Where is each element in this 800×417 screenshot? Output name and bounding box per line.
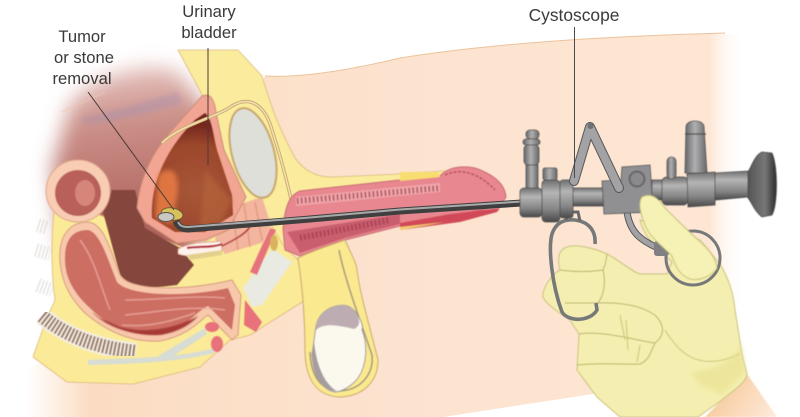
scope barrel xyxy=(520,188,542,217)
scrotum and testis xyxy=(298,240,378,397)
cystoscope lever arm xyxy=(574,123,619,188)
leader line: tumor or stone xyxy=(88,92,174,210)
leader line: urinary bladder xyxy=(207,48,209,165)
urinary bladder lumen xyxy=(152,113,233,232)
finger lines xyxy=(560,254,662,365)
cystoscope shaft xyxy=(176,202,522,229)
tumor or stone xyxy=(158,206,184,222)
prostate xyxy=(178,197,271,260)
stopcock xyxy=(543,168,557,180)
glove palm and fingers xyxy=(543,220,747,417)
block xyxy=(602,165,652,214)
penis xyxy=(283,167,506,256)
cystoscope body xyxy=(520,121,776,222)
pubic bone xyxy=(221,103,285,203)
label: tumor or stone removal: Tumor xyxy=(58,27,106,46)
sacrum bone xyxy=(42,316,136,352)
fat layer: pelvis and abdomen xyxy=(178,50,445,260)
glove hand xyxy=(543,220,777,417)
fat layer: lower pelvis xyxy=(33,205,307,384)
thumb lever xyxy=(627,212,669,256)
thumb xyxy=(640,195,717,279)
rectum ring xyxy=(46,160,110,222)
label: tumor or stone removal: or stone xyxy=(54,48,114,67)
pelvic floor muscle bands xyxy=(88,322,223,365)
urinary bladder wall xyxy=(137,95,246,243)
leader line: cystoscope xyxy=(574,27,576,178)
lower back bones xyxy=(36,225,52,290)
finger ring handle xyxy=(550,212,597,319)
eyepiece xyxy=(748,152,776,217)
skin top contour xyxy=(265,33,725,76)
light post xyxy=(526,130,539,139)
label: tumor or stone removal: removal xyxy=(52,69,112,88)
pelvic cavity xyxy=(52,67,215,260)
tall post xyxy=(685,121,707,173)
label: urinary bladder: bladder xyxy=(181,23,237,42)
thumb ring xyxy=(666,231,720,285)
rectum xyxy=(60,222,241,341)
vas deferens tube xyxy=(162,102,310,372)
perineal fan and sphincter muscle xyxy=(243,228,292,332)
cavity lower wall xyxy=(103,190,194,290)
small pin xyxy=(667,157,676,179)
label: cystoscope: Cystoscope xyxy=(529,5,619,25)
label: urinary bladder: Urinary xyxy=(182,2,236,21)
wrist xyxy=(705,374,777,417)
